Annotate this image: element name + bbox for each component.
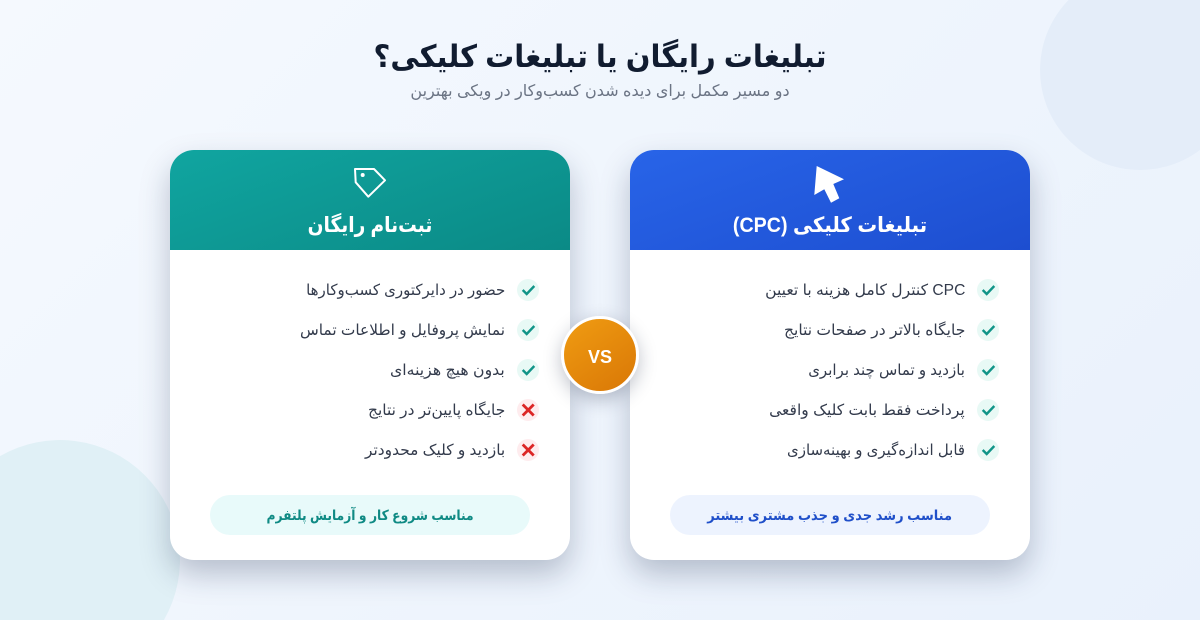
icon: price tag <box>354 168 386 198</box>
feature: measurable: قابل اندازه‌گیری و بهینه‌سازی <box>787 442 965 459</box>
feature: no cost: بدون هیچ هزینه‌ای <box>390 362 505 379</box>
VS badge: VS <box>588 347 612 367</box>
feature: directory listing <box>306 279 539 301</box>
header: CPC <box>630 150 1030 250</box>
background circle: top right <box>1040 0 1200 170</box>
title: تبلیغات رایگان یا تبلیغات کلیکی؟ <box>374 39 826 74</box>
feature: higher position: جایگاه بالاتر در صفحات نتایج <box>784 322 965 339</box>
header: free registration <box>170 150 570 250</box>
icon: cursor <box>814 166 844 203</box>
VS badge <box>561 316 639 394</box>
feature: lower position <box>368 399 539 421</box>
feature: higher position <box>784 319 999 341</box>
feature: limited clicks <box>364 439 539 461</box>
feature: more visits: بازدید و تماس چند برابری <box>808 362 965 379</box>
panel: CPC ads <box>630 150 1030 560</box>
heading: ثبت‌نام رایگان <box>308 214 432 237</box>
callout: free <box>210 495 530 535</box>
feature: measurable <box>787 439 999 461</box>
callout: CPC: مناسب رشد جدی و جذب مشتری بیشتر <box>708 507 952 523</box>
feature: cost control: CPC کنترل کامل هزینه با تعیین <box>765 282 965 299</box>
feature: pay per click: پرداخت فقط بابت کلیک واقعی <box>769 402 965 419</box>
feature: lower position: جایگاه پایین‌تر در نتایج <box>368 402 505 419</box>
feature: cost control <box>765 279 999 301</box>
feature: directory listing: حضور در دایرکتوری کسب‌وکارها <box>306 282 505 299</box>
feature: more visits <box>808 359 999 381</box>
callout: free: مناسب شروع کار و آزمایش پلتفرم <box>266 507 474 523</box>
feature: profile <box>300 319 539 341</box>
panel: free registration <box>170 150 570 560</box>
feature: pay per click <box>769 399 999 421</box>
heading: تبلیغات کلیکی (CPC) <box>733 214 927 237</box>
feature: no cost <box>390 359 539 381</box>
subtitle: دو مسیر مکمل برای دیده شدن کسب‌وکار در ویکی بهترین <box>410 83 790 100</box>
callout: CPC <box>670 495 990 535</box>
feature: profile: نمایش پروفایل و اطلاعات تماس <box>300 322 505 339</box>
background circle: bottom left <box>0 440 180 620</box>
feature: limited clicks: بازدید و کلیک محدودتر <box>365 442 505 459</box>
